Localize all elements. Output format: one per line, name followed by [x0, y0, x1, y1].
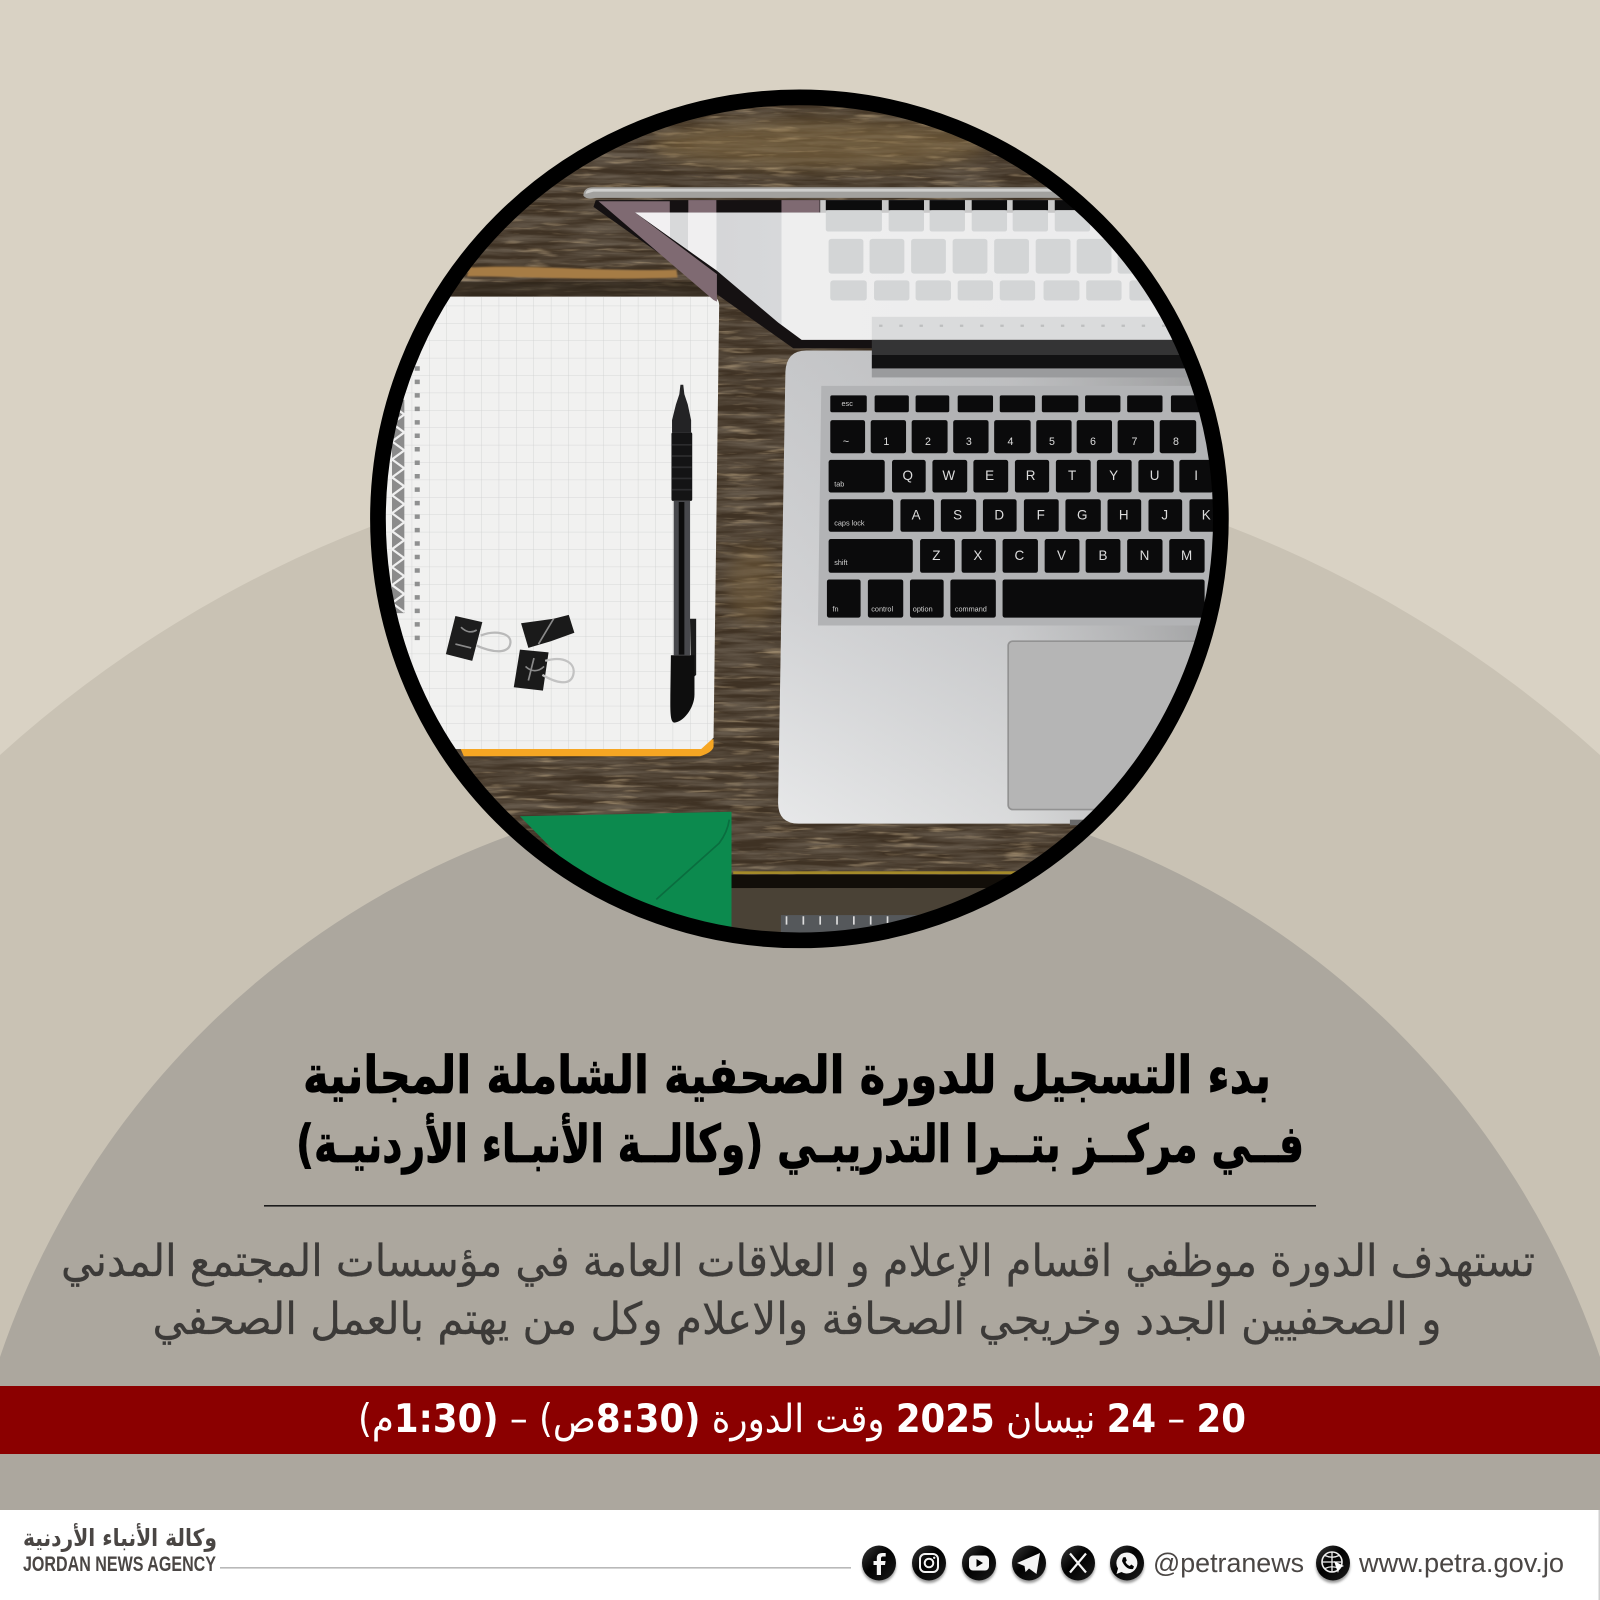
agency logo text: JORDAN NEWS AGENCY: [23, 1553, 216, 1576]
keyboard: I: [1194, 468, 1198, 483]
description text: تستهدف الدورة موظفي اقسام الإعلام و العلاقات العامة في مؤسسات المجتمع المدني: [61, 1236, 1535, 1287]
footer: [0, 1510, 1600, 1600]
keyboard: K: [1202, 507, 1211, 522]
agency logo text: وكالة الأنباء الأردنية: [23, 1523, 217, 1552]
keyboard: Q: [902, 468, 913, 483]
title: [296, 1046, 1304, 1175]
photo ring: [378, 97, 1221, 940]
divider: [264, 1205, 1316, 1207]
circular photo: laptop and notebook on a wooden desk: [360, 80, 1240, 960]
keyboard: C: [1015, 548, 1025, 563]
notebook: [377, 297, 719, 756]
keyboard: X: [973, 548, 982, 563]
icon: whatsapp: [1110, 1546, 1144, 1583]
keyboard: T: [1068, 468, 1076, 483]
keyboard: E: [985, 468, 994, 483]
wooden desk: [450, 105, 1078, 932]
icon: youtube: [962, 1546, 996, 1583]
icon: instagram: [912, 1546, 946, 1583]
keyboard: shift: [834, 558, 848, 567]
keyboard: 2: [925, 436, 931, 448]
keyboard: caps lock: [834, 519, 865, 528]
binder clips: [446, 615, 574, 691]
keyboard: 1: [883, 436, 889, 448]
description text: و الصحفيين الجدد وخريجي الصحافة والاعلام وكل من يهتم بالعمل الصحفي: [152, 1294, 1442, 1345]
keyboard: option: [913, 604, 933, 613]
keyboard: control: [871, 604, 893, 613]
keyboard: 4: [1007, 436, 1013, 448]
keyboard: 7: [1131, 436, 1137, 448]
keyboard: 5: [1049, 436, 1055, 448]
keyboard: W: [942, 468, 955, 483]
agency logo text: [23, 1523, 217, 1576]
keyboard: N: [1140, 548, 1149, 563]
icon: X: [1061, 1546, 1095, 1583]
title: فــي مركــز بتــرا التدريبـي (وكالــة الأنبـاء الأردنيـة): [296, 1112, 1304, 1175]
date band: [0, 1386, 1600, 1454]
keyboard: Z: [932, 548, 940, 563]
keyboard: tab: [834, 479, 844, 488]
back arc: [0, 447, 1600, 1510]
keyboard: Y: [1109, 468, 1118, 483]
title: بدء التسجيل للدورة الصحفية الشاملة المجانية: [303, 1046, 1271, 1106]
keyboard: A: [912, 507, 921, 522]
icon: facebook: [862, 1546, 896, 1583]
description text: [61, 1236, 1535, 1345]
laptop screen reflection: [583, 187, 1240, 348]
keyboard: U: [1150, 468, 1160, 483]
keyboard: [827, 395, 1218, 618]
keyboard: H: [1119, 507, 1129, 522]
keyboard: D: [994, 507, 1004, 522]
keyboard: M: [1181, 548, 1192, 563]
front arc: [0, 784, 1600, 1510]
keyboard: V: [1057, 548, 1066, 563]
green envelope: [520, 812, 732, 933]
pen: [670, 385, 696, 723]
footer rule: [220, 1567, 851, 1569]
date and time text: 20 – 24 نيسان 2025 وقت الدورة (8:30ص) – (1:30م): [358, 1397, 1246, 1442]
icon: globe: [1316, 1546, 1350, 1583]
ruler: [781, 915, 918, 932]
handle text: @petranews: [1153, 1548, 1304, 1578]
keyboard: B: [1099, 548, 1108, 563]
icon: telegram: [1012, 1546, 1046, 1583]
keyboard: F: [1037, 507, 1045, 522]
keyboard: command: [955, 604, 987, 613]
keyboard: ~: [843, 436, 849, 448]
keyboard: 6: [1090, 436, 1096, 448]
keyboard: R: [1026, 468, 1036, 483]
keyboard: G: [1077, 507, 1087, 522]
keyboard: esc: [842, 399, 853, 408]
laptop base: [778, 340, 1240, 825]
keyboard: J: [1161, 507, 1168, 522]
keyboard: fn: [833, 604, 839, 613]
keyboard: 8: [1173, 436, 1179, 448]
website text: www.petra.gov.jo: [1358, 1548, 1564, 1578]
keyboard: S: [953, 507, 962, 522]
keyboard: 3: [966, 436, 972, 448]
